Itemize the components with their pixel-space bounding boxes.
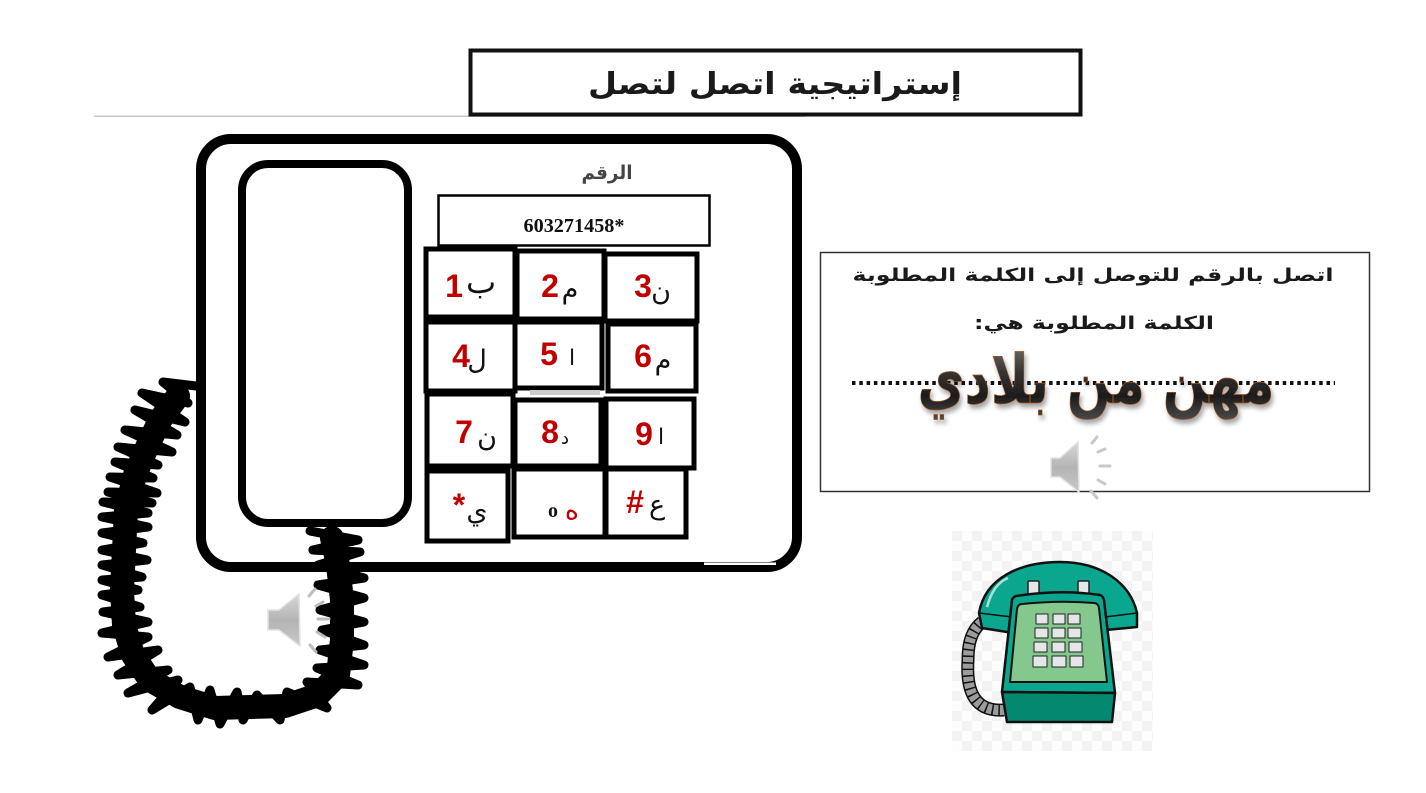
handset earpiece seams [979,613,1137,617]
key star: ي [466,496,488,527]
keypad [426,249,697,541]
green dial panel [1010,602,1107,682]
key 3: 3 [634,268,652,304]
telephone body outline [201,139,797,567]
answer prompt: الكلمة المطلوبة هي: [974,313,1214,334]
key 8: 8 [541,414,559,450]
coiled cord [968,622,1004,710]
key 5: ا [569,346,575,371]
key 1 [426,249,515,317]
key star [427,471,508,541]
key 1: ب [466,263,496,301]
key star: * [453,487,466,523]
key 4 [426,322,515,391]
key hash: # [626,484,644,520]
cord behind handset joint [310,531,360,552]
key 7: 7 [455,414,473,450]
cradle prongs [1028,581,1089,594]
key 9 [606,399,694,468]
key 9: 9 [635,416,653,452]
icon: coiled phone cord [102,382,364,724]
key 9: ا [658,425,664,450]
key 6: م [655,345,671,376]
key 8: د [561,428,569,449]
phone face [1002,592,1115,693]
key 8 [515,400,601,466]
key 2: م [562,274,578,305]
key zero [514,469,605,537]
key hash [606,469,686,537]
key 4: ل [467,345,487,376]
title box [470,50,1080,114]
icon: speaker in panel [1051,437,1110,498]
key 3 [605,254,697,321]
label: number: الرقم [582,162,632,184]
divider under title [94,116,805,117]
key 2 [517,251,604,319]
dial buttons [1033,614,1083,667]
handset [979,562,1137,632]
answer word: مهن من بلادي [918,341,1274,420]
key 3: ن [651,276,671,307]
handset shine [987,578,1008,607]
covered fragments [530,390,600,395]
key zero: ه [565,495,579,526]
key 6: 6 [634,338,652,374]
phone number: 603271458* [524,215,624,237]
illustration: green telephone [952,531,1153,751]
icon: speaker on phone [268,589,329,652]
key 7: ن [477,422,497,453]
key 5: 5 [540,336,558,372]
checker background [952,531,1153,751]
key 4: 4 [452,338,470,374]
phone base [1002,692,1115,722]
key 2: 2 [541,268,559,304]
key zero: o [548,500,558,522]
key 1: 1 [445,268,463,304]
handset outline [242,164,408,523]
title text: إستراتيجية اتصل لتصل [588,67,962,102]
key 5 [515,322,602,388]
instruction line: اتصل بالرقم للتوصل إلى الكلمة المطلوبة [852,265,1334,286]
number display [438,196,710,246]
panel: instructions and answer [820,252,1370,498]
dotted answer line [852,381,1335,385]
key hash: ع [649,490,665,521]
white notch on lower edge of body [704,562,776,565]
key 6 [608,324,696,391]
key 7 [427,394,513,466]
